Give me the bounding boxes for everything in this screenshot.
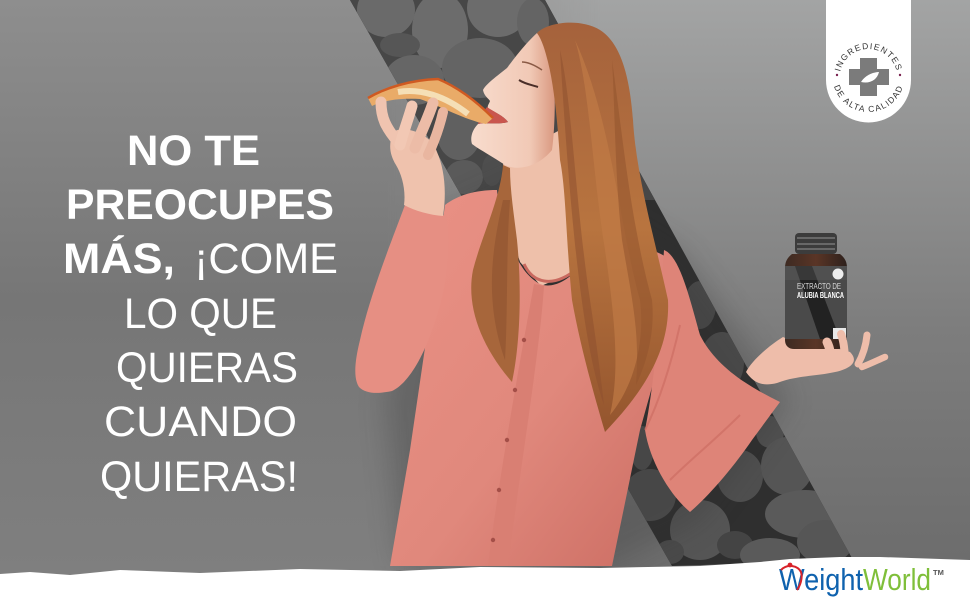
torn white footer strip [0, 557, 970, 600]
WeightWorld logo: World [863, 562, 931, 597]
headline text: ¡COME [194, 235, 338, 283]
headline text: QUIERAS! [100, 453, 298, 501]
pizza slice [368, 79, 493, 124]
product bottle: ALUBIA BLANCA [797, 291, 844, 300]
WeightWorld logo [779, 562, 944, 597]
headline text: PREOCUPES [66, 181, 334, 229]
fingers in front of bottle [827, 334, 885, 367]
headline text: LO QUE [124, 290, 277, 338]
sweater body [390, 190, 672, 566]
headline text: NO TE [127, 127, 260, 175]
headline text: MÁS, [63, 235, 175, 283]
cardigan placket and buttons [488, 264, 578, 566]
hand holding pizza [381, 102, 445, 216]
product bottle [785, 233, 847, 349]
WeightWorld logo: TM [933, 568, 944, 577]
quality badge: DE ALTA CALIDAD [834, 84, 902, 112]
headline text [63, 127, 338, 501]
product bottle: EXTRACTO DE [797, 282, 841, 291]
left sleeve [355, 205, 449, 393]
right sleeve [645, 250, 780, 512]
lips [478, 107, 508, 124]
woman eating pizza [355, 23, 854, 566]
eye [519, 80, 538, 87]
headline text: QUIERAS [116, 344, 298, 392]
quality badge [826, 0, 911, 122]
face [471, 33, 555, 168]
soft shadow behind woman [385, 170, 790, 566]
WeightWorld logo: Weight [779, 562, 863, 597]
diagonal band of grey stones [350, 0, 852, 566]
main hair [537, 23, 668, 432]
palm under bottle [746, 337, 854, 384]
quality badge: INGREDIENTES [834, 43, 902, 71]
headline text: CUANDO [104, 398, 297, 446]
left hair strand [471, 165, 520, 382]
neck [503, 130, 578, 286]
icon: medical cross with leaf [849, 58, 889, 96]
